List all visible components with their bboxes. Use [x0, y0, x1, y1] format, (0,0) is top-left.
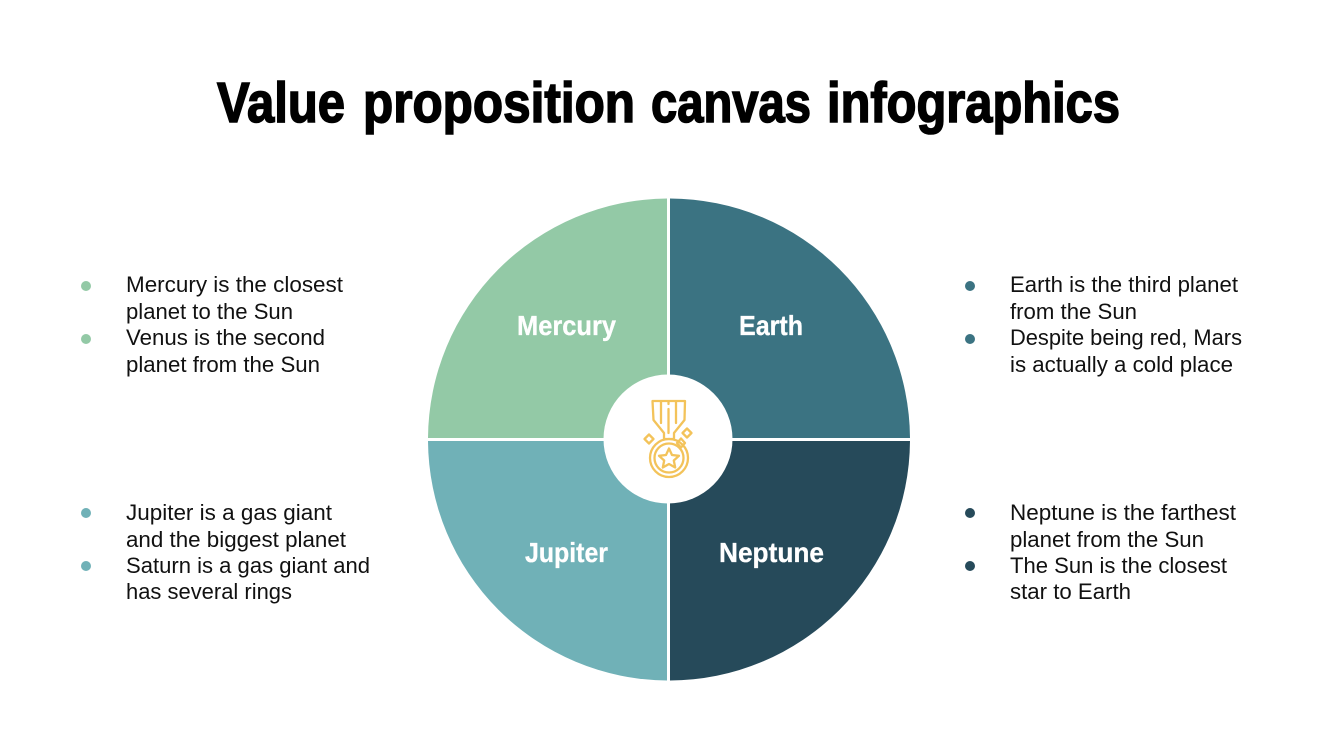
text block: Earth and Mars: is actually a cold place [1010, 352, 1233, 377]
text block: Mercury and Venus: Mercury is the closest [126, 272, 343, 297]
center circle [604, 374, 732, 504]
text block: Jupiter and Saturn: has several rings [126, 579, 292, 604]
text block: Jupiter and Saturn: Saturn is a gas giant and [126, 553, 370, 578]
text block: Jupiter and Saturn: Jupiter is a gas giant [126, 500, 332, 525]
quadrant: Jupiter: Jupiter [525, 537, 608, 568]
text block: Earth and Mars: Earth is the third planet [1010, 272, 1238, 297]
bullet [81, 281, 91, 291]
text block: Mercury and Venus [81, 272, 343, 377]
quadrant: Jupiter [428, 441, 667, 680]
quadrant: Neptune: Neptune [719, 537, 824, 568]
text block: Earth and Mars [965, 272, 1242, 377]
text block: Earth and Mars: from the Sun [1010, 299, 1137, 324]
quadrant: Mercury [428, 198, 667, 438]
text block: Jupiter and Saturn: and the biggest planet [126, 527, 346, 552]
title: proposition [363, 71, 635, 135]
text block: Mercury and Venus: planet from the Sun [126, 352, 320, 377]
text block: Mercury and Venus: planet to the Sun [126, 299, 293, 324]
text block: Neptune and the Sun: star to Earth [1010, 579, 1131, 604]
text block: Neptune and the Sun: planet from the Sun [1010, 527, 1204, 552]
circular diagram [428, 198, 910, 680]
icon: medal [644, 401, 692, 477]
text block: Mercury and Venus: Venus is the second [126, 325, 325, 350]
quadrant: Earth [670, 198, 910, 438]
title: infographics [827, 71, 1120, 135]
bullet [965, 334, 975, 344]
bullet [965, 281, 975, 291]
bullet [81, 561, 91, 571]
title: Value [217, 71, 345, 135]
bullet [965, 508, 975, 518]
text block: Earth and Mars: Despite being red, Mars [1010, 325, 1242, 350]
text block: Jupiter and Saturn [81, 500, 370, 604]
title: canvas [651, 71, 811, 135]
quadrant: Neptune [670, 441, 910, 680]
text block: Neptune and the Sun [965, 500, 1236, 604]
bullet [965, 561, 975, 571]
quadrant: Earth: Earth [739, 310, 803, 341]
bullet [81, 334, 91, 344]
text block: Neptune and the Sun: Neptune is the farthest [1010, 500, 1236, 525]
quadrant: Mercury: Mercury [517, 310, 616, 341]
text block: Neptune and the Sun: The Sun is the closest [1010, 553, 1227, 578]
title [217, 71, 1120, 135]
bullet [81, 508, 91, 518]
